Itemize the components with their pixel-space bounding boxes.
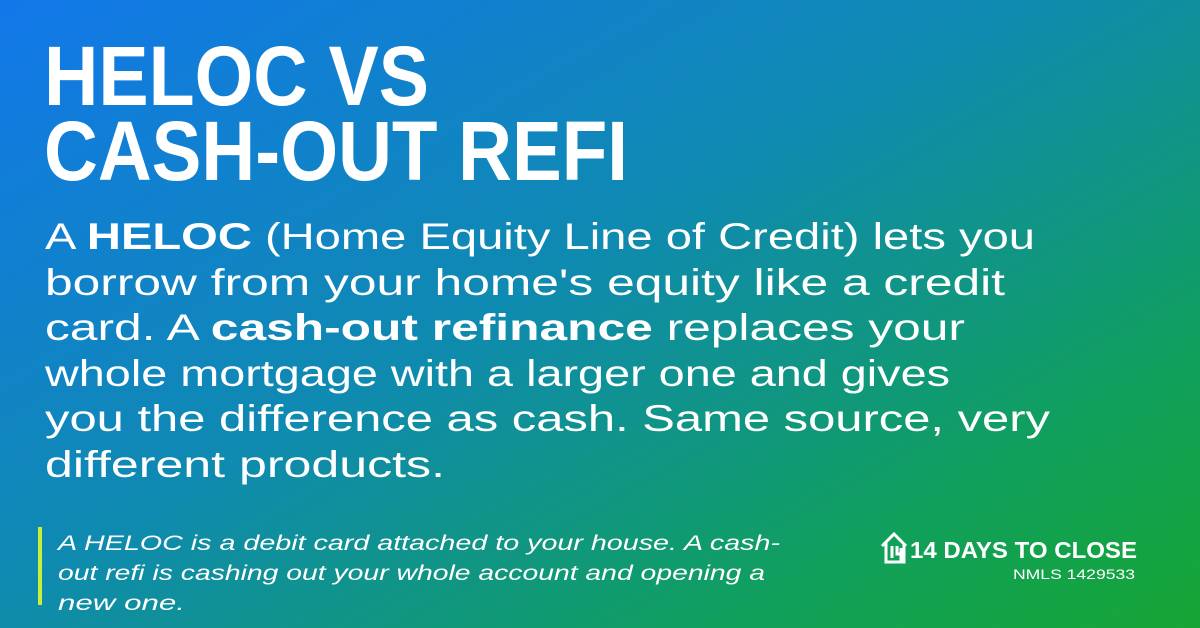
body text: different products. — [45, 444, 445, 485]
title: CASH-OUT REFI — [44, 104, 628, 198]
body text: card. A cash-out refinance replaces your — [45, 307, 965, 348]
callout quote: A HELOC is a debit card attached to your house. A cash- — [55, 532, 780, 555]
icon: house 14 — [882, 534, 906, 562]
body text: A HELOC (Home Equity Line of Credit) lets you — [45, 216, 1035, 257]
callout quote: out refi is cashing out your whole account and opening a — [58, 562, 765, 585]
body text: borrow from your home's equity like a credit — [45, 262, 1006, 303]
body text — [44, 216, 1051, 485]
callout quote — [38, 527, 780, 615]
title: HELOC VS — [44, 29, 429, 123]
nmls: NMLS 1429533 — [1013, 566, 1135, 582]
title — [44, 29, 628, 198]
logo — [882, 534, 1137, 582]
callout quote: new one. — [58, 592, 185, 615]
body text: you the difference as cash. Same source, very — [45, 398, 1051, 439]
body text: whole mortgage with a larger one and gives — [44, 353, 950, 394]
logo text: 14 DAYS TO CLOSE — [910, 537, 1137, 563]
